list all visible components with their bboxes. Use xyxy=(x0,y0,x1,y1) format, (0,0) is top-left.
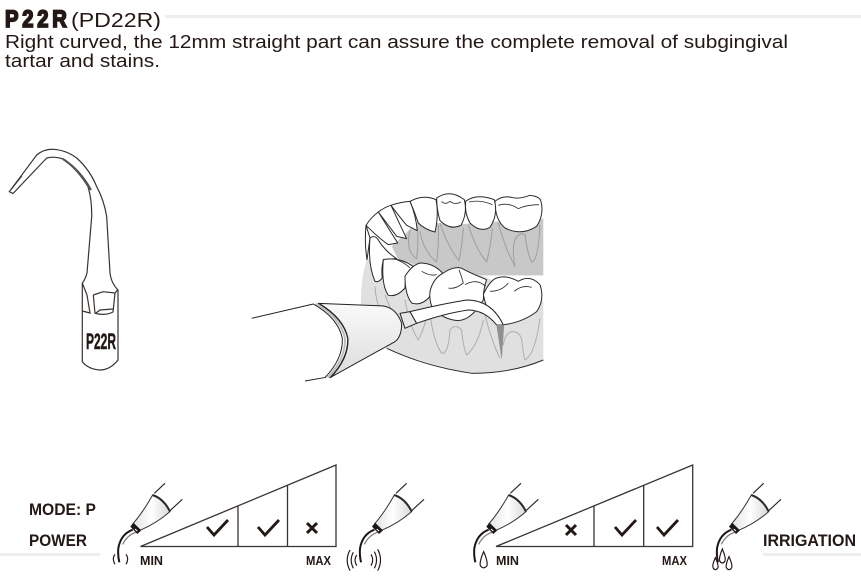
description text xyxy=(5,31,788,71)
header rule xyxy=(165,15,861,18)
handpiece nozzle xyxy=(400,312,417,328)
handpiece xyxy=(252,300,504,381)
icon: check xyxy=(615,520,636,535)
icon: handpiece low irrigation xyxy=(474,483,538,568)
label: mode: MODE: P xyxy=(29,500,96,519)
tip engraving: P22R xyxy=(86,329,116,354)
upper gum xyxy=(392,218,543,275)
description text: Right curved, the 12mm straight part can assure the complete removal of subgingival xyxy=(5,31,788,52)
label: max: MAX xyxy=(306,553,331,568)
lower gum xyxy=(361,260,543,373)
right footer rule xyxy=(763,553,861,556)
icon: check xyxy=(657,520,678,535)
teeth and scaler illustration xyxy=(252,194,543,381)
icon: check xyxy=(258,520,279,535)
icon: handpiece low power xyxy=(113,483,182,564)
lower roots xyxy=(375,287,540,360)
icon: cross xyxy=(307,523,317,533)
mouth illustration xyxy=(361,194,543,373)
upper teeth xyxy=(366,194,542,245)
icon: handpiece high irrigation xyxy=(713,483,781,570)
title: P22R xyxy=(5,5,71,32)
label: min: MIN xyxy=(140,553,163,568)
irrigation chart xyxy=(496,465,693,568)
label: irrigation: IRRIGATION xyxy=(763,531,856,550)
description text: tartar and stains. xyxy=(5,50,160,71)
power chart xyxy=(140,465,336,568)
label: max: MAX xyxy=(662,553,687,568)
upper roots xyxy=(408,223,540,266)
scaler needle xyxy=(410,300,503,325)
lower teeth xyxy=(365,225,542,325)
icon: check xyxy=(207,520,228,535)
title: (PD22R) xyxy=(71,10,161,32)
left footer rule xyxy=(0,553,100,556)
label: min: MIN xyxy=(496,553,519,568)
label: power: POWER xyxy=(29,531,87,550)
icon: handpiece high power xyxy=(347,483,424,571)
title xyxy=(5,5,161,32)
icon: cross xyxy=(566,525,576,535)
scaler tip illustration xyxy=(9,149,118,370)
